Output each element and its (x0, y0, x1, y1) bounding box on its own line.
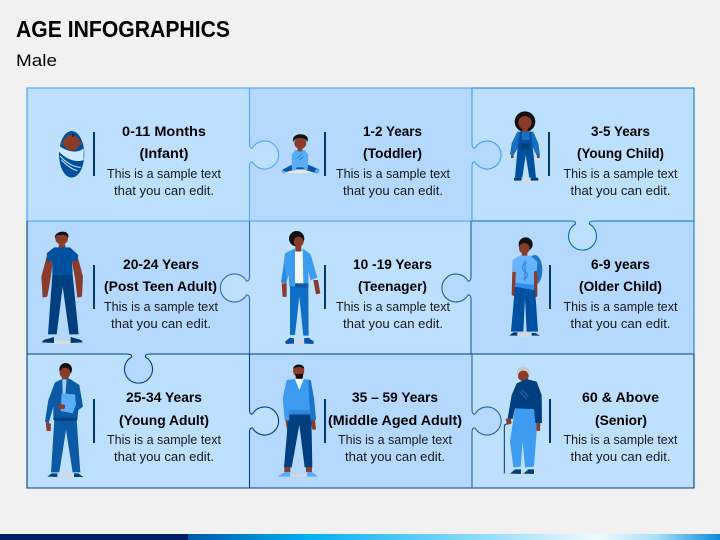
divider (324, 132, 326, 176)
text: teenager: that you can edit. (343, 317, 443, 331)
text: young child: that you can edit. (570, 184, 670, 198)
puzzle background (27, 88, 694, 488)
text: post teen adult (104, 256, 219, 331)
text: older child: (Older Child) (579, 278, 662, 294)
text: teenager: (Teenager) (358, 278, 427, 294)
icon: older child (509, 237, 542, 337)
text: young child: 3-5 Years (591, 123, 650, 139)
text: older child: 6-9 years (591, 256, 650, 272)
panel: toddler (250, 88, 472, 221)
divider (93, 399, 95, 443)
knob fills (124, 141, 597, 435)
text: senior: that you can edit. (570, 450, 670, 464)
icon: senior (504, 366, 542, 474)
icon: teenager (281, 231, 320, 344)
text: toddler: that you can edit. (343, 184, 443, 198)
text: older child: that you can edit. (570, 317, 670, 331)
text: older child (564, 256, 678, 331)
text: teenager (336, 256, 451, 331)
text: post teen adult: 20-24 Years (123, 256, 199, 272)
text: young adult: (Young Adult) (119, 412, 209, 428)
text: toddler (336, 123, 451, 198)
text: senior: 60 & Above (582, 389, 659, 405)
icon: toddler (282, 134, 320, 174)
panel: older child (471, 221, 694, 354)
text: teenager: This is a sample text (336, 300, 451, 314)
divider (324, 399, 326, 443)
panel: middle aged adult (250, 354, 472, 488)
text: older child: This is a sample text (564, 300, 678, 314)
text: senior: This is a sample text (564, 433, 678, 447)
text: infant: that you can edit. (114, 184, 214, 198)
text: young adult: This is a sample text (107, 433, 222, 447)
puzzle outlines (27, 88, 694, 488)
text: infant: 0-11 Months (122, 123, 206, 139)
text: teenager: 10 -19 Years (353, 256, 432, 272)
panel: post teen adult (27, 221, 250, 354)
text: young adult: 25-34 Years (126, 389, 202, 405)
divider (93, 265, 95, 309)
divider (549, 399, 551, 443)
divider (548, 132, 550, 176)
text: infant (107, 123, 222, 198)
subtitle: Male (16, 51, 57, 70)
icon: post teen adult (41, 232, 83, 344)
text: middle aged adult: This is a sample text (338, 433, 453, 447)
text: senior: (Senior) (595, 412, 647, 428)
title: AGE INFOGRAPHICS (16, 16, 230, 42)
icon: swaddled infant (59, 131, 84, 178)
divider (93, 132, 95, 176)
text: post teen adult: This is a sample text (104, 300, 219, 314)
text: toddler: This is a sample text (336, 167, 451, 181)
text: toddler: 1-2 Years (363, 123, 422, 139)
panel: teenager (250, 221, 471, 354)
divider (324, 265, 326, 309)
text: young adult (107, 389, 222, 464)
text: post teen adult: that you can edit. (111, 317, 211, 331)
text: young child: (Young Child) (577, 145, 664, 161)
panel: infant (27, 88, 250, 221)
text: post teen adult: (Post Teen Adult) (104, 278, 217, 294)
text: middle aged adult: 35 – 59 Years (352, 389, 438, 405)
text: young adult: that you can edit. (114, 450, 214, 464)
panel: young adult (27, 354, 250, 488)
text: toddler: (Toddler) (363, 145, 422, 161)
text: young child: This is a sample text (564, 167, 678, 181)
text: middle aged adult: that you can edit. (345, 450, 445, 464)
icon: young child (510, 111, 542, 182)
text: senior (564, 389, 678, 464)
text: middle aged adult: (Middle Aged Adult) (328, 412, 462, 428)
icon: young adult (45, 363, 83, 477)
icon: middle aged adult (278, 364, 318, 477)
footer bar (0, 534, 720, 540)
divider (549, 265, 551, 309)
text: infant: This is a sample text (107, 167, 222, 181)
panel: young child (472, 88, 694, 221)
text: infant: (Infant) (140, 145, 188, 161)
text: young child (564, 123, 678, 198)
text: middle aged adult (328, 389, 462, 464)
panel: senior (472, 354, 694, 488)
